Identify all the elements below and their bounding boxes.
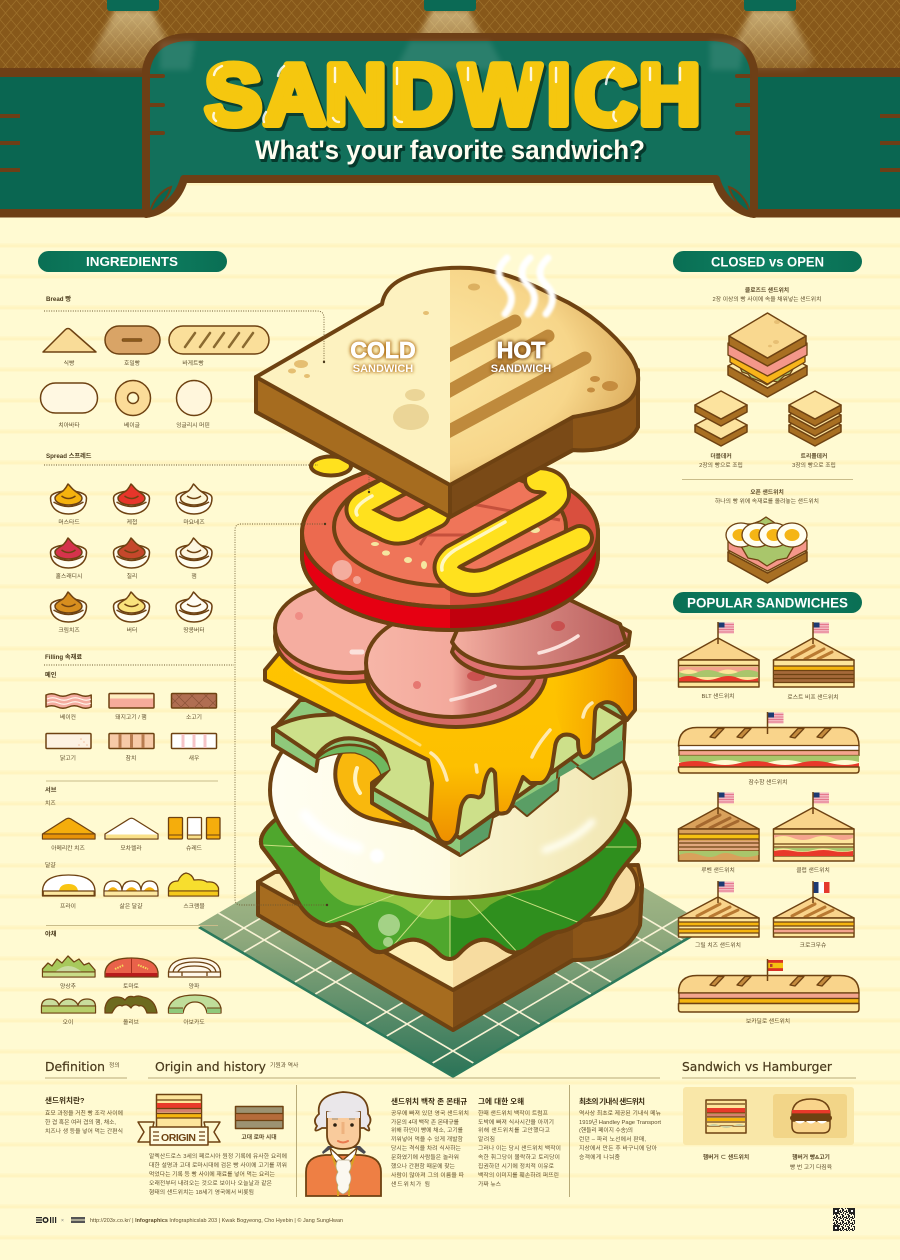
egg icons bbox=[42, 873, 218, 896]
comparison labels bbox=[703, 1153, 833, 1171]
vegetable labels bbox=[60, 982, 205, 1026]
meat labels: 소고기 bbox=[186, 713, 202, 721]
cheese icons bbox=[42, 818, 220, 839]
open sandwich icon bbox=[726, 517, 807, 583]
heading pill: POPULAR SANDWICHES bbox=[687, 594, 848, 610]
egg labels bbox=[60, 902, 205, 910]
grilled cheese label: 그릴 치즈 샌드위치 bbox=[695, 941, 741, 949]
vegetable labels: 오이 bbox=[63, 1018, 73, 1026]
QR code bbox=[833, 1208, 855, 1231]
roast beef sandwich bbox=[774, 622, 854, 687]
spread labels: 땅콩버터 bbox=[183, 626, 205, 634]
filling main label: 메인 bbox=[45, 671, 57, 679]
triple decker icon bbox=[789, 391, 841, 446]
earl text column: 했으나 간편함 때문에 찾는 bbox=[391, 1162, 456, 1170]
panel: ingredients bbox=[38, 251, 269, 1026]
meat labels: 새우 bbox=[189, 754, 200, 762]
lamps bbox=[107, 0, 796, 11]
reuben label: 루벤 샌드위치 bbox=[701, 866, 735, 874]
partner logo bbox=[71, 1217, 85, 1223]
leader dots bbox=[323, 361, 370, 906]
spread labels: 마요네즈 bbox=[183, 518, 205, 526]
comparison labels: 빵 번 고기 다짐육 bbox=[790, 1163, 833, 1171]
origin paragraph bbox=[149, 1152, 287, 1196]
vegetable labels: 올리브 bbox=[123, 1018, 140, 1026]
misconception text column: 집권하던 시기에 정치적 이유로 bbox=[478, 1162, 555, 1170]
closed sandwich icon bbox=[728, 313, 807, 397]
spread labels: 머스타드 bbox=[58, 518, 80, 526]
comparison heading: Sandwich vs Hamburger bbox=[682, 1060, 832, 1074]
heading pill: CLOSED vs OPEN bbox=[711, 254, 824, 270]
misconception text column: 가짜 뉴스 bbox=[478, 1180, 502, 1188]
hamburger icon bbox=[790, 1099, 832, 1133]
spread labels: 크림치즈 bbox=[58, 626, 80, 634]
earl text column: 사람이 많아져 그의 이름을 따 bbox=[391, 1171, 465, 1179]
first in-flight meal column: 1919년 Handley Page Transport bbox=[579, 1118, 661, 1126]
open description: 오픈 샌드위치 bbox=[750, 488, 784, 496]
bottom bread bbox=[258, 860, 642, 1030]
club sandwich bbox=[774, 792, 854, 861]
ancient roman sandwich bbox=[236, 1106, 283, 1128]
origin sandwich badge: ORIGIN bbox=[161, 1132, 197, 1144]
misconception text column: 백작의 이미지를 훼손하려 퍼뜨린 bbox=[478, 1171, 559, 1179]
spread labels: 케첩 bbox=[127, 518, 137, 526]
BLT sandwich bbox=[678, 622, 759, 687]
green banner bbox=[146, 37, 754, 214]
origin paragraph: 형태의 샌드위치는 18세기 영국에서 비롯됨 bbox=[149, 1188, 254, 1196]
meat labels: 베이컨 bbox=[60, 713, 76, 721]
origin heading bbox=[148, 1060, 660, 1078]
panel: sandwich vs hamburger bbox=[682, 1060, 856, 1171]
misconception text column: 도박에 빠져 식사시간을 아끼기 bbox=[478, 1118, 554, 1126]
callout leaders bbox=[44, 311, 369, 905]
croque label: 크로크무슈 bbox=[800, 942, 827, 949]
closed description bbox=[713, 286, 821, 303]
tablecloth bbox=[198, 888, 692, 1078]
egg labels: 스크램블 bbox=[183, 903, 205, 910]
bread heading: Bread 빵 bbox=[46, 295, 71, 303]
meat labels: 돼지고기 / 햄 bbox=[115, 713, 147, 721]
cheese labels bbox=[51, 844, 203, 852]
footer bbox=[36, 1208, 855, 1231]
bread labels: 호밀빵 bbox=[124, 359, 141, 367]
ham slices bbox=[275, 583, 630, 727]
bocadillo sandwich bbox=[678, 959, 859, 1012]
hot label: SANDWICH bbox=[491, 363, 551, 375]
earl text column: 샌드위치가 됨 bbox=[391, 1180, 430, 1188]
definition text: 한 겹 혹은 여러 겹의 햄, 채소, bbox=[45, 1118, 116, 1126]
egg labels: 삶은 달걀 bbox=[120, 902, 143, 910]
origin paragraph: 오래전부터 내려오는 것으로 보이나 오늘날과 같은 bbox=[149, 1179, 273, 1187]
bread labels: 치아바타 bbox=[58, 421, 80, 429]
grilled cheese sandwich bbox=[678, 881, 759, 937]
cheese bbox=[265, 652, 635, 843]
first in-flight meal column: 지상에서 만든 후 바구니에 담아 bbox=[579, 1144, 658, 1152]
cheese labels: 모차렐라 bbox=[120, 844, 142, 852]
hot label: SANDWICH bbox=[491, 363, 551, 375]
first in-flight meal column: (핸들리 페이지 수송)의 bbox=[579, 1126, 633, 1134]
wall lattice bbox=[0, 0, 900, 70]
club label: 클럽 샌드위치 bbox=[796, 866, 830, 874]
spread labels bbox=[56, 518, 205, 634]
yolk bbox=[335, 748, 412, 828]
vegetable labels: 토마토 bbox=[123, 982, 140, 990]
earl text column: 가문의 4대 백작 존 몬태규를 bbox=[391, 1118, 460, 1126]
submarine sandwich bbox=[678, 712, 859, 773]
bread holes bbox=[288, 284, 618, 430]
spread bowls bbox=[50, 484, 212, 622]
misconception text column: 그에 대한 오해 bbox=[478, 1096, 524, 1106]
steam bbox=[499, 258, 552, 314]
first in-flight meal column: 런던 – 파리 노선에서 판매, bbox=[579, 1135, 646, 1143]
hot label bbox=[491, 337, 551, 375]
croque monsieur bbox=[774, 881, 854, 937]
cheese labels: 아메리칸 치즈 bbox=[51, 844, 85, 852]
logo bbox=[36, 1217, 56, 1223]
decker labels: 더블데커 bbox=[710, 452, 732, 460]
first in-flight meal column: 승객에게 나눠줌 bbox=[579, 1153, 621, 1161]
vegetable labels: 양파 bbox=[189, 982, 200, 990]
cold label: SANDWICH bbox=[353, 363, 413, 375]
ham left bbox=[275, 583, 425, 682]
cheese labels: 슈레드 bbox=[186, 844, 203, 852]
meat labels: 참치 bbox=[126, 754, 136, 762]
egg white bbox=[270, 682, 630, 898]
avocado bbox=[273, 700, 625, 855]
open description: 하나의 빵 위에 속재료를 올려놓는 샌드위치 bbox=[715, 497, 819, 505]
definition text: 샌드위치란? bbox=[45, 1095, 85, 1105]
earl text column: 끼워넣어 먹을 수 있게 개발함 bbox=[391, 1135, 464, 1143]
meat labels: 닭고기 bbox=[60, 754, 76, 762]
bread icons bbox=[40, 326, 269, 416]
panel: origin and history bbox=[138, 1060, 662, 1197]
first in-flight meal column: 최초의 기내식 샌드위치 bbox=[579, 1096, 645, 1106]
partner mark: × bbox=[61, 1218, 64, 1224]
origin sandwich badge bbox=[138, 1094, 220, 1145]
main sandwich bbox=[256, 258, 650, 1030]
cold label: SANDWICH bbox=[353, 363, 413, 375]
cheese label: 치즈 bbox=[45, 799, 56, 807]
misconception text column: 속한 휘그당이 몰락하고 토리당이 bbox=[478, 1153, 560, 1161]
earl text column: 샌드위치 백작 존 몬태규 bbox=[391, 1096, 467, 1106]
origin paragraph: 대한 설명과 고대 로마시대에 검은 빵 사이에 고기를 끼워 bbox=[149, 1161, 287, 1169]
origin paragraph: 먹었다는 기록 등 빵 사이에 재료를 넣어 먹는 요리는 bbox=[149, 1170, 276, 1178]
comparison backdrop bbox=[683, 1087, 854, 1145]
earl text column bbox=[391, 1096, 469, 1188]
sub filling label: 서브 bbox=[45, 786, 57, 794]
vegetable label: 야채 bbox=[45, 930, 57, 938]
definition text bbox=[45, 1095, 123, 1135]
open description bbox=[715, 488, 819, 505]
heading pill: INGREDIENTS bbox=[86, 254, 178, 269]
bread labels bbox=[58, 359, 210, 429]
misconception text column bbox=[478, 1096, 561, 1188]
spread labels: 버터 bbox=[127, 626, 137, 634]
definition heading bbox=[45, 1060, 127, 1078]
spread labels: 잼 bbox=[191, 573, 197, 580]
lettuce bbox=[258, 818, 642, 961]
pickles bbox=[356, 480, 580, 583]
cold label: COLD bbox=[350, 337, 416, 363]
subtitle: What's your favorite sandwich? bbox=[257, 137, 647, 167]
top bread bbox=[256, 268, 638, 517]
definition heading: Definition bbox=[45, 1060, 105, 1074]
title: SANDWICH bbox=[205, 48, 700, 143]
tomato bbox=[302, 456, 598, 630]
subtitle: What's your favorite sandwich? bbox=[255, 135, 645, 165]
ham right bbox=[452, 600, 630, 678]
origin heading: 기원과 역사 bbox=[270, 1061, 299, 1069]
definition heading: 정의 bbox=[109, 1061, 120, 1069]
decker labels: 2장의 빵으로 조립 bbox=[699, 461, 743, 469]
panel: popular sandwiches bbox=[673, 592, 862, 1025]
roast beef label: 로스트 비프 샌드위치 bbox=[787, 693, 839, 701]
earl text column: 위해 하인이 빵에 채소, 고기를 bbox=[391, 1126, 464, 1134]
earl text column: 공무에 빠져 있던 영국 샌드위치 bbox=[391, 1109, 469, 1117]
egg label: 달걀 bbox=[45, 861, 56, 869]
vegetable labels: 아보카도 bbox=[183, 1018, 205, 1026]
earl text column: 문화였기에 사람들은 놀라워 bbox=[391, 1153, 459, 1161]
submarine label: 잠수함 샌드위치 bbox=[749, 778, 787, 786]
heading pill bbox=[673, 592, 862, 613]
bread labels: 바게트빵 bbox=[182, 359, 204, 367]
bread labels: 베이글 bbox=[124, 421, 141, 429]
double decker icon bbox=[695, 391, 747, 446]
definition text: 치즈나 생 등을 넣어 먹는 간편식 bbox=[45, 1127, 123, 1135]
misconception text column: 그러나 이는 당시 샌드위치 백작이 bbox=[478, 1144, 561, 1152]
title: SANDWICH bbox=[208, 51, 703, 146]
closed description: 2장 이상의 빵 사이에 속을 채워넣는 샌드위치 bbox=[713, 295, 821, 303]
reuben sandwich bbox=[678, 792, 759, 861]
bread labels: 식빵 bbox=[64, 359, 75, 367]
meat labels bbox=[60, 713, 202, 762]
credits: http://203x.co.kr/ | Infographics Infographicslab 203 | Kwak Bogyeong, Cho Hyebin | © Jang SungHwan bbox=[90, 1217, 343, 1224]
bread labels: 잉글리시 머핀 bbox=[176, 421, 210, 429]
decker labels: 3장의 빵으로 조립 bbox=[792, 461, 836, 469]
side green panels bbox=[0, 68, 900, 218]
lamp lights bbox=[88, 10, 815, 70]
heading pill bbox=[673, 251, 862, 272]
filling heading: Filling 속재료 bbox=[45, 653, 82, 661]
ancient roman label: 고대 로마 시대 bbox=[241, 1133, 277, 1141]
spread heading: Spread 스프레드 bbox=[46, 452, 92, 460]
misconception text column: 한때 샌드위치 백작이 트럼프 bbox=[478, 1109, 549, 1117]
meat icons bbox=[46, 694, 216, 748]
vegetable labels: 양상추 bbox=[60, 982, 77, 990]
origin heading: Origin and history bbox=[155, 1060, 266, 1074]
BLT label: BLT 샌드위치 bbox=[701, 692, 735, 700]
misconception text column: 알려짐 bbox=[478, 1135, 495, 1143]
spread labels: 칠리 bbox=[127, 572, 137, 580]
portrait of earl of sandwich bbox=[306, 1092, 381, 1196]
comparison labels: 햄버거 빵&고기 bbox=[792, 1153, 830, 1161]
decker labels: 트리플데커 bbox=[801, 452, 827, 460]
header awning bbox=[0, 0, 900, 218]
definition text: 효모 과정을 거친 빵 조각 사이에 bbox=[45, 1109, 123, 1117]
cold label: COLD bbox=[350, 337, 416, 363]
bocadillo label: 보카딜로 샌드위치 bbox=[746, 1017, 790, 1025]
hot label: HOT bbox=[497, 337, 545, 363]
hot label: HOT bbox=[497, 337, 545, 363]
bubble bbox=[378, 914, 400, 947]
panel: closed vs open bbox=[673, 251, 862, 583]
first in-flight meal column bbox=[579, 1096, 662, 1161]
sandwich icon bbox=[706, 1100, 746, 1133]
vegetable icons bbox=[42, 956, 221, 1013]
first in-flight meal column: 역사상 최초로 제공된 기내식 메뉴 bbox=[579, 1109, 662, 1117]
misconception text column: 위해 샌드위치를 고안했다고 bbox=[478, 1126, 551, 1134]
heading pill bbox=[38, 251, 227, 272]
egg labels: 프라이 bbox=[60, 902, 76, 910]
origin paragraph: 알렉산드로스 3세의 페르시아 원정 기록에 유사한 요리에 bbox=[149, 1152, 287, 1160]
spread labels: 홀스래디시 bbox=[56, 572, 82, 580]
cold label bbox=[350, 337, 416, 375]
decker labels bbox=[699, 452, 836, 469]
comparison labels: 햄버거 ⊂ 샌드위치 bbox=[703, 1153, 749, 1161]
closed description: 클로즈드 샌드위치 bbox=[745, 286, 789, 294]
panel: definition bbox=[45, 1060, 127, 1135]
earl text column: 당시는 격식을 차려 식사하는 bbox=[391, 1144, 462, 1152]
ham middle bbox=[352, 609, 546, 727]
